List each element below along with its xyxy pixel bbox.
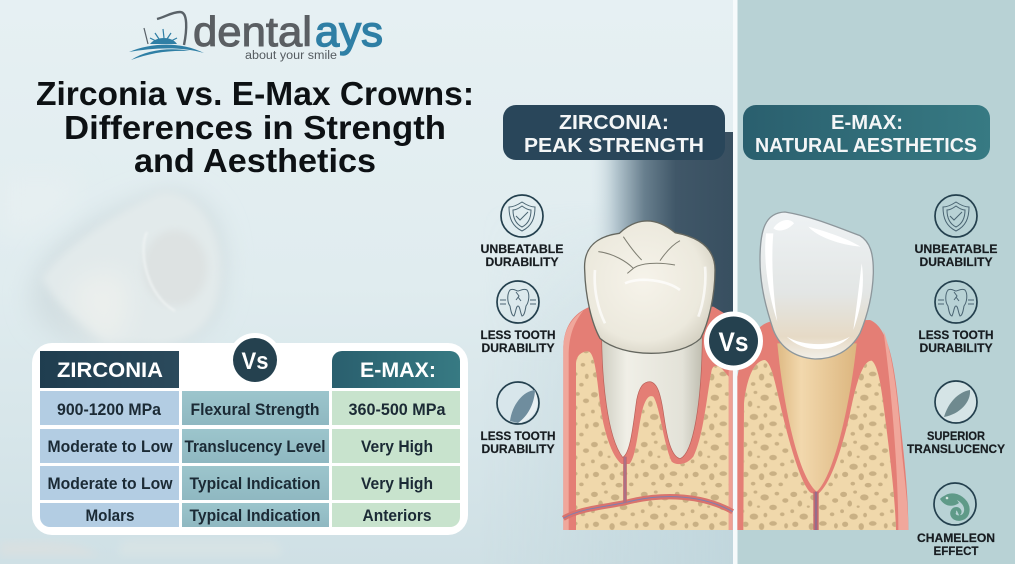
table header: zirconia: ZIRCONIA [57, 359, 163, 382]
logo [129, 8, 383, 62]
background: left panel [0, 245, 733, 564]
heading: zirconia peak strength [503, 105, 725, 160]
table column: criteria: Translucency Level [184, 437, 326, 456]
icon: shield [935, 195, 977, 237]
incisor gum [737, 320, 908, 530]
feature: less tooth durability (zirconia) [480, 281, 556, 355]
heading: zirconia peak strength: ZIRCONIA: [559, 112, 669, 134]
table column: zirconia values: Molars [86, 506, 134, 525]
table header: e-max [332, 351, 460, 388]
molar illustration [563, 221, 733, 530]
feature: unbeatable durability (e-max): DURABILITY [920, 255, 992, 269]
table column: e-max values: 360-500 MPa [348, 400, 446, 419]
title: Zirconia vs. E-Max Crowns: [36, 76, 474, 113]
feature: unbeatable durability (zirconia): UNBEATABLE [480, 242, 564, 256]
icon: cracked tooth [497, 281, 539, 323]
feature: less tooth durability 2 (zirconia) [480, 382, 556, 456]
table column: zirconia values: 900-1200 MPa [57, 400, 161, 419]
feature: unbeatable durability (e-max): UNBEATABLE [914, 242, 998, 256]
table column: criteria: Typical Indication [190, 506, 320, 525]
heading: e-max natural aesthetics: NATURAL AESTHETICS [755, 135, 977, 157]
feature: less tooth durability (zirconia): DURABILITY [482, 341, 554, 355]
icon: cracked tooth [935, 281, 977, 323]
incisor crown [760, 212, 873, 359]
incisor root [777, 343, 857, 492]
feature: chameleon effect: EFFECT [934, 544, 979, 558]
logo: tagline: about your smile [245, 50, 337, 62]
icon: shield [501, 195, 543, 237]
center vs badge: Vs [718, 327, 748, 357]
table column: zirconia values [40, 391, 179, 527]
table column: criteria [182, 391, 329, 527]
center divider [733, 0, 738, 564]
table column: e-max values [332, 391, 460, 527]
molar bone [576, 351, 729, 530]
table column: e-max values: Very High [361, 437, 433, 456]
incisor canal [808, 492, 824, 530]
molar crown grooves [598, 237, 680, 273]
feature: unbeatable durability (zirconia): DURABILITY [486, 255, 558, 269]
incisor crown highlights [765, 220, 863, 349]
icon: translucent lens [935, 381, 977, 423]
table column: e-max values: Very High [361, 474, 433, 493]
feature: chameleon effect: CHAMELEON [917, 531, 995, 545]
molar crown [585, 221, 715, 353]
feature: less tooth durability (e-max) [918, 281, 994, 355]
molar crown highlights [595, 267, 705, 323]
feature: superior translucency: SUPERIOR [927, 429, 985, 443]
table column: criteria: Typical Indication [190, 474, 320, 493]
background: ghost teeth [0, 175, 281, 556]
table column: zirconia values: Moderate to Low [48, 474, 173, 493]
feature: superior translucency: TRANSLUCENCY [907, 442, 1005, 456]
logo: wordmark: dental [193, 8, 312, 55]
table header: zirconia [40, 351, 179, 388]
heading: e-max natural aesthetics: E-MAX: [831, 112, 903, 134]
icon: chameleon [934, 483, 976, 525]
feature: less tooth durability (e-max): LESS TOOTH [918, 328, 994, 342]
incisor illustration [737, 212, 908, 530]
molar nerve canals [563, 457, 733, 518]
feature: less tooth durability (zirconia): LESS TOOTH [480, 328, 556, 342]
molar roots [602, 337, 702, 459]
table header: e-max: E-MAX: [360, 359, 436, 382]
title: and Aesthetics [134, 143, 376, 180]
feature: less tooth durability 2 (zirconia): LESS TOOTH [480, 429, 556, 443]
table card [32, 343, 468, 535]
incisor bone [743, 360, 896, 530]
center vs badge [704, 312, 763, 370]
feature: superior translucency [907, 381, 1005, 456]
comparison table [32, 333, 468, 535]
background: dark strength panel [590, 132, 733, 352]
feature: unbeatable durability (e-max) [914, 195, 998, 269]
logo: ays [315, 8, 383, 56]
molar gum [563, 307, 733, 530]
table column: e-max values: Anteriors [362, 506, 432, 525]
table column: criteria: Flexural Strength [190, 400, 320, 419]
feature: unbeatable durability (zirconia) [480, 195, 564, 269]
background: right panel [737, 0, 1015, 564]
logo: tooth and sunrise mark [129, 12, 204, 60]
title: Differences in Strength [64, 110, 446, 147]
feature: less tooth durability 2 (zirconia): DURABILITY [482, 442, 554, 456]
heading: e-max natural aesthetics [743, 105, 990, 160]
icon: translucent lens [497, 382, 539, 424]
table vs badge: Vs [242, 348, 268, 375]
heading: zirconia peak strength: PEAK STRENGTH [524, 135, 704, 157]
title [36, 76, 474, 180]
feature: chameleon effect [917, 483, 995, 558]
feature: less tooth durability (e-max): DURABILITY [920, 341, 992, 355]
table column: zirconia values: Moderate to Low [48, 437, 173, 456]
table vs badge [228, 333, 282, 387]
